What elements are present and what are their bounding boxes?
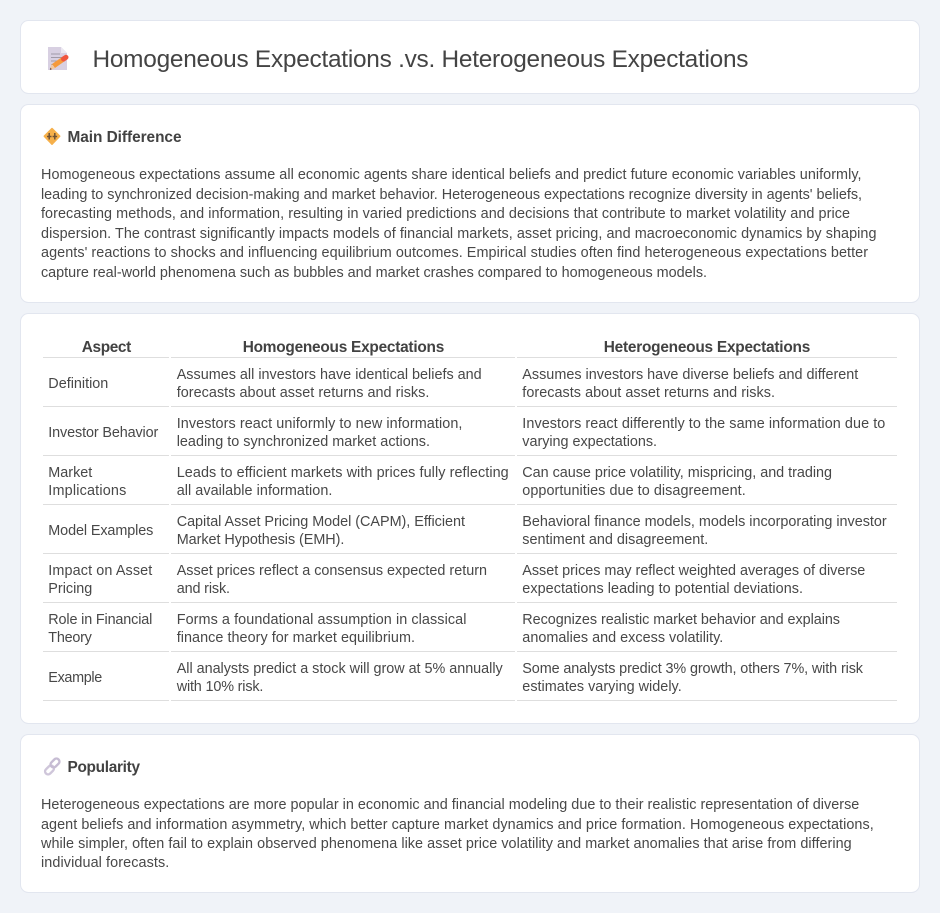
table row: market implications: Leads to efficient markets with prices fully reflecting: [177, 465, 509, 481]
panel: main difference: [20, 104, 920, 302]
panel: popularity: [20, 734, 920, 892]
table row: investor behavior: varying expectations.: [522, 434, 657, 450]
table row: example: estimates varying widely.: [522, 679, 682, 695]
table row: role in financial theory: finance theory for market equilibrium.: [177, 630, 415, 646]
table row: definition: forecasts about asset returns and risks.: [177, 385, 429, 401]
table row: model examples: sentiment and disagreement.: [522, 532, 708, 548]
table row: impact on asset pricing: Pricing: [48, 581, 92, 597]
heading: main difference: Main Difference: [68, 129, 182, 146]
table row: investor behavior: Investor Behavior: [48, 425, 159, 441]
table row: definition: [43, 367, 897, 407]
table row: model examples: Behavioral finance models, models incorporating investor: [522, 514, 887, 530]
title: Homogeneous Expectations .vs. Heterogeneous Expectations: [92, 46, 748, 73]
icon: document with pencil: [48, 47, 67, 70]
panel: comparison table: [20, 314, 920, 724]
table row: model examples: Market Hypothesis (EMH).: [177, 532, 344, 548]
table header row: Homogeneous Expectations: [243, 339, 444, 356]
table row: definition: forecasts about asset returns and risks.: [522, 385, 775, 401]
table header row: Aspect: [82, 339, 131, 356]
table row: market implications: all available information.: [177, 483, 332, 499]
icon: diamond sign: [44, 128, 60, 144]
panel: page header: [20, 20, 920, 94]
table row: role in financial theory: [43, 612, 897, 652]
text block: main difference paragraph: capture real-world phenomena such as bubbles and market crashes compared to homogeneous models.: [41, 265, 707, 281]
table row: definition: Assumes investors have diverse beliefs and different: [522, 367, 858, 383]
table row: role in financial theory: Recognizes realistic market behavior and explains: [522, 612, 840, 628]
table row: investor behavior: Investors react differently to the same information due to: [522, 416, 885, 432]
table row: impact on asset pricing: expectations leading to potential deviations.: [522, 581, 803, 597]
text block: popularity paragraph: agent beliefs and information asymmetry, which better capture market dynamics and price formation. Homogeneous expectations,: [41, 817, 874, 833]
text block: popularity paragraph: while simpler, often fail to explain observed phenomena like asset price volatility and market anomalies that arise from differing: [40, 836, 852, 852]
heading: popularity: Popularity: [68, 759, 140, 776]
text block: popularity paragraph: individual forecasts.: [41, 855, 169, 871]
table row: model examples: Capital Asset Pricing Model (CAPM), Efficient: [177, 514, 465, 530]
table row: impact on asset pricing: Impact on Asset: [48, 563, 152, 579]
table row: market implications: opportunities due to disagreement.: [522, 483, 746, 499]
table row: impact on asset pricing: Asset prices may reflect weighted averages of diverse: [522, 563, 865, 579]
text block: main difference paragraph: Homogeneous expectations assume all economic agents share identical beliefs and predict future economic variables uniformly,: [41, 167, 862, 183]
table row: role in financial theory: Role in Financial: [48, 612, 152, 628]
table row: example: Some analysts predict 3% growth, others 7%, with risk: [522, 661, 864, 677]
icon: chain link: [44, 757, 61, 776]
table row: investor behavior: leading to synchronized market actions.: [177, 434, 430, 450]
table row: impact on asset pricing: and risk.: [177, 581, 230, 597]
table row: investor behavior: Investors react uniformly to new information,: [177, 416, 462, 432]
text block: main difference paragraph: leading to synchronized decision-making and market behavior. Heterogeneous expectations recognize diversity in agents' beliefs,: [41, 187, 862, 203]
table row: example: All analysts predict a stock will grow at 5% annually: [177, 661, 503, 677]
table row: model examples: [43, 514, 897, 554]
text block: main difference paragraph: forecasting methods, and information, resulting in varied predictions and decisions that contribute to market volatility and price: [41, 206, 850, 222]
table row: definition: Assumes all investors have identical beliefs and: [177, 367, 482, 383]
table row: market implications: [43, 465, 897, 505]
text block: main difference paragraph: agents' reactions to shocks and influencing equilibrium outcomes. Empirical studies often find heterogeneous expectations better: [41, 245, 868, 261]
table row: market implications: Implications: [48, 483, 126, 499]
table row: example: [43, 661, 897, 701]
text block: popularity paragraph: [40, 797, 874, 871]
table row: role in financial theory: anomalies and excess volatility.: [522, 630, 723, 646]
table row: role in financial theory: Forms a foundational assumption in classical: [177, 612, 466, 628]
table header row: [43, 339, 897, 358]
table row: definition: Definition: [48, 376, 108, 392]
table row: market implications: Can cause price volatility, mispricing, and trading: [522, 465, 832, 481]
text block: main difference paragraph: [41, 167, 876, 281]
table row: impact on asset pricing: Asset prices reflect a consensus expected return: [177, 563, 487, 579]
table row: investor behavior: [43, 416, 897, 456]
text block: main difference paragraph: dispersion. The contrast significantly impacts models of financial markets, asset pricing, and macroeconomic dynamics by shaping: [41, 226, 876, 242]
table row: example: with 10% risk.: [176, 679, 263, 695]
table row: example: Example: [48, 670, 102, 686]
text block: popularity paragraph: Heterogeneous expectations are more popular in economic and financial modeling due to their realistic representation of diverse: [41, 797, 859, 813]
table header row: Heterogeneous Expectations: [604, 339, 810, 356]
table row: impact on asset pricing: [43, 563, 897, 603]
table row: market implications: Market: [48, 465, 92, 481]
table row: role in financial theory: Theory: [48, 630, 93, 646]
table row: model examples: Model Examples: [48, 523, 153, 539]
